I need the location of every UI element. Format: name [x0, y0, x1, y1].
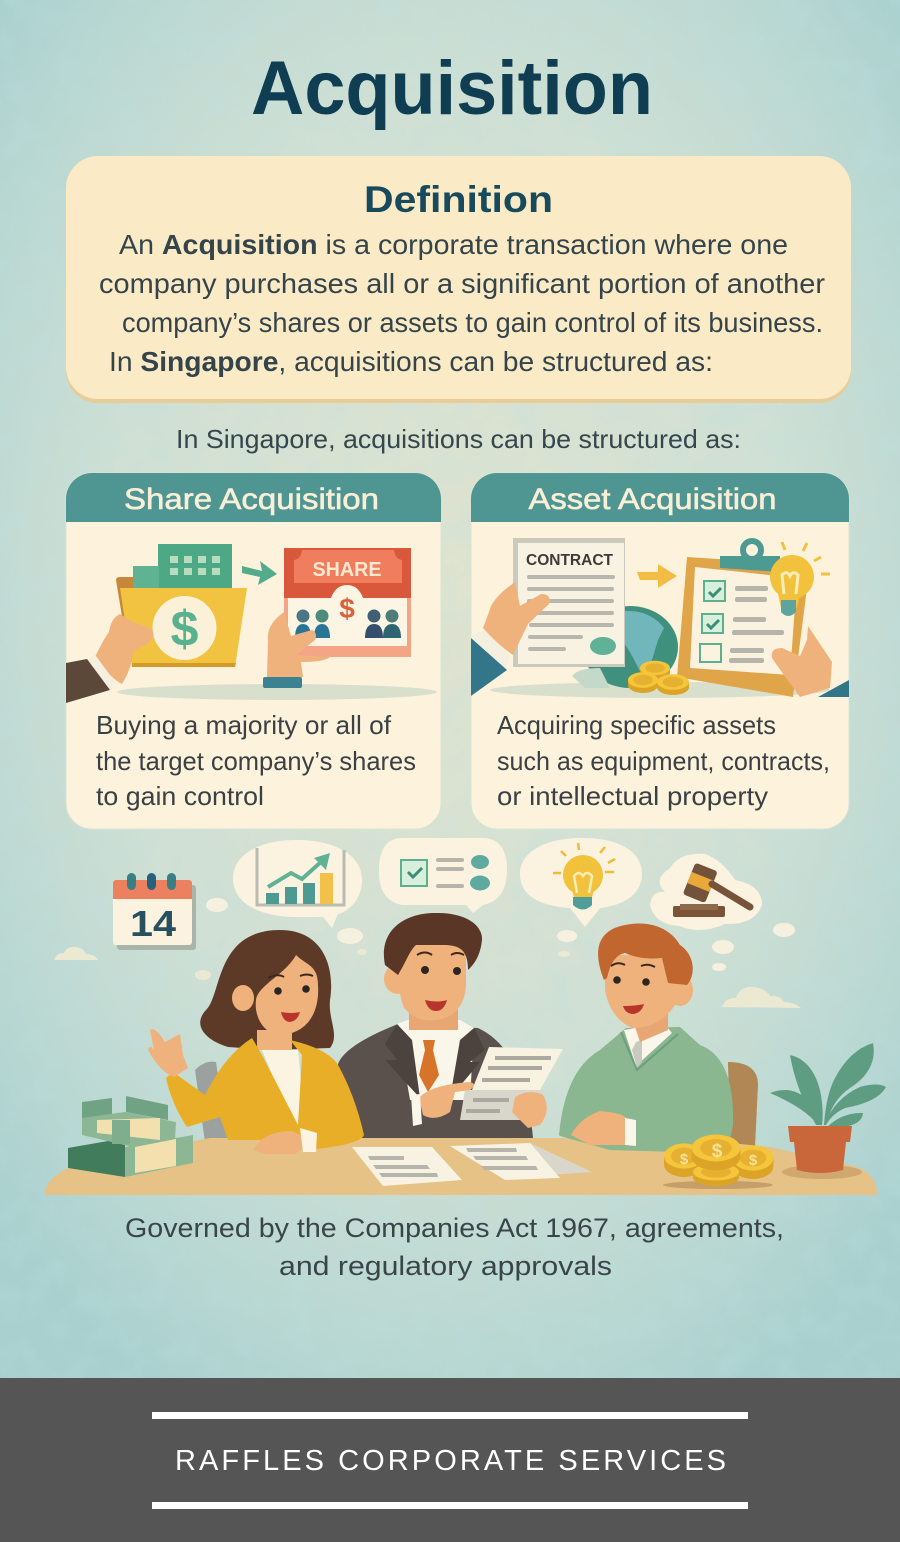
icon: calendar: 14 — [130, 903, 176, 944]
text block: structure intro: In Singapore, acquisitions can be structured as: — [176, 424, 741, 454]
text block: asset description — [497, 710, 830, 811]
illustration: meeting scene — [45, 838, 886, 1195]
heading: definition: Definition — [364, 179, 553, 220]
icon: cash stacks — [68, 1096, 193, 1177]
icon: asset illustration — [471, 538, 849, 698]
chair: right man — [728, 1062, 758, 1147]
panel: share acquisition — [66, 473, 441, 829]
document: table paper right — [450, 1143, 592, 1180]
person: middle man — [338, 913, 563, 1138]
bubble: growth chart — [233, 840, 362, 928]
plant — [770, 1043, 886, 1179]
panel header: asset acquisition: Asset Acquisition — [528, 483, 776, 516]
panel header: share acquisition — [66, 473, 441, 522]
text block: definition body: In Singapore, acquisitions can be structured as: — [109, 346, 713, 377]
icon: share illustration — [66, 544, 437, 703]
panel: asset acquisition — [471, 473, 849, 829]
icon: money folder — [116, 544, 247, 667]
icon: share certificate: SHARE — [312, 559, 382, 581]
icon: gold coins — [663, 1135, 773, 1189]
bubble: gavel cloud — [650, 854, 762, 930]
panel: definition — [66, 156, 851, 403]
person: woman — [148, 930, 364, 1154]
icon: contract document — [513, 538, 625, 667]
text block: governance note — [125, 1213, 784, 1281]
arrow — [637, 564, 677, 588]
person: right man — [559, 924, 733, 1152]
text block: share description: the target company’s shares — [96, 746, 416, 776]
text block: definition body: An Acquisition is a corporate transaction where one — [119, 229, 788, 260]
text block: share description — [96, 710, 416, 811]
text block: share description: Buying a majority or all of — [96, 710, 392, 740]
icon: share certificate: $ — [339, 593, 355, 624]
icon: left hand — [66, 614, 154, 703]
text block: asset description: Acquiring specific assets — [497, 710, 776, 740]
clouds and thought dots — [54, 898, 801, 1008]
icon: clipboard — [677, 541, 810, 697]
text block: definition body: company purchases all or a significant portion of another — [99, 268, 825, 299]
chair: woman — [195, 1062, 228, 1142]
text block: share description: to gain control — [96, 781, 264, 811]
icon: gold coins: $ — [680, 1151, 689, 1168]
icon: share certificate — [284, 548, 411, 657]
bubble: checklist — [379, 838, 507, 913]
document: table paper left — [352, 1147, 462, 1186]
text block: asset description: such as equipment, contracts, — [497, 746, 830, 776]
icon: right hand — [263, 612, 330, 688]
title: Acquisition — [251, 46, 653, 131]
icon: left hand — [471, 582, 550, 696]
icon: contract document: CONTRACT — [526, 552, 613, 569]
text block: definition body: company’s shares or assets to gain control of its business. — [122, 307, 823, 338]
icon: coins — [628, 661, 689, 695]
reports held — [460, 1047, 563, 1120]
panel header: share acquisition: Share Acquisition — [124, 483, 379, 516]
text block: definition body — [99, 229, 825, 377]
panel header: asset acquisition — [471, 473, 849, 522]
icon: gold coins: $ — [749, 1152, 758, 1169]
icon: right hand — [772, 626, 849, 697]
text block: governance note: and regulatory approvals — [279, 1251, 612, 1281]
jacket — [166, 1038, 364, 1150]
raised hand — [148, 1029, 188, 1077]
text block: governance note: Governed by the Companies Act 1967, agreements, — [125, 1213, 784, 1243]
arrow — [242, 561, 277, 585]
table — [45, 1138, 877, 1195]
footer brand: RAFFLES CORPORATE SERVICES — [175, 1445, 726, 1477]
icon: gold coins: $ — [712, 1141, 723, 1162]
hand on table — [254, 1131, 306, 1154]
bubble: light bulb — [520, 838, 642, 927]
icon: light bulb — [770, 542, 830, 616]
icon: calendar — [113, 873, 196, 950]
text block: asset description: or intellectual property — [497, 781, 768, 811]
footer — [0, 1378, 900, 1542]
icon: globe — [572, 606, 678, 688]
icon: money folder: $ — [171, 601, 199, 657]
